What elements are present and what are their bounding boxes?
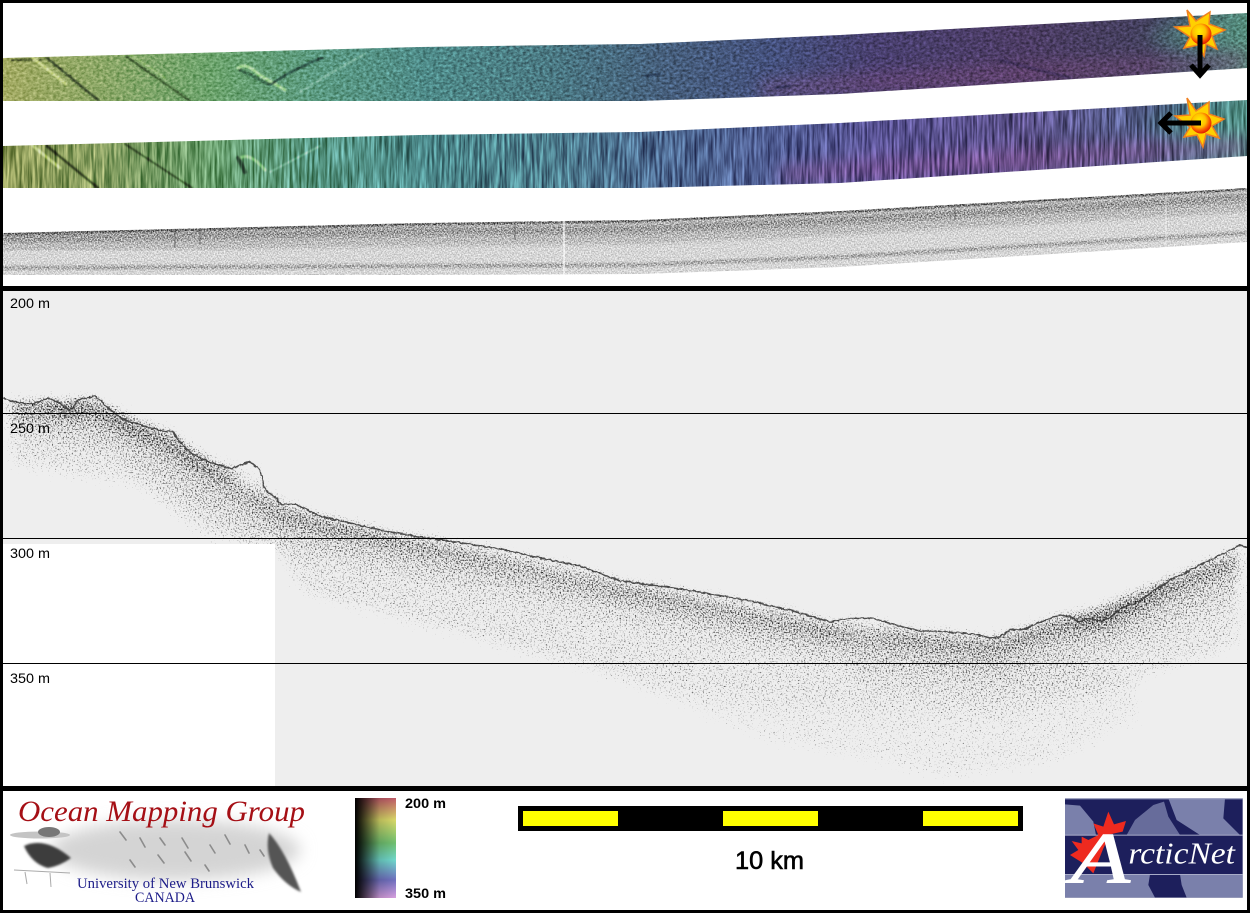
panel: sonar depth profile [3, 291, 1247, 786]
icon: sun lighting from north with arrow [1175, 10, 1225, 75]
depth label 350 m: 350 m [10, 670, 50, 686]
logo title: Ocean Mapping Group [18, 795, 305, 828]
strip: bathymetry lit from east [3, 98, 1247, 193]
depth label 300 m: 300 m [10, 545, 50, 561]
logo: Ocean Mapping Group [10, 795, 305, 906]
legend label bottom: 350 m [405, 885, 446, 901]
chart: sub-bottom speckle returns [3, 396, 1247, 785]
depth label 250 m: 250 m [10, 420, 50, 436]
logo initial: A [1065, 818, 1132, 898]
legend: depth colour bar [355, 795, 446, 901]
icon: sun lighting from east with arrow [1161, 98, 1224, 147]
panel: sun-illuminated bathymetry strips and backscatter [3, 10, 1247, 280]
depth label 200 m: 200 m [10, 295, 50, 311]
icon: maple leaf [1093, 812, 1126, 835]
icon: fish [268, 833, 301, 892]
blank data area [3, 544, 275, 786]
legend label top: 200 m [405, 795, 446, 811]
scale label: 10 km [735, 847, 804, 875]
strip: bathymetry lit from north [3, 10, 1247, 105]
logo subtitle: University of New Brunswick [77, 876, 255, 892]
logo: ArcticNet [1065, 798, 1243, 898]
logo wordmark: rcticNet [1128, 836, 1237, 870]
line: seabed profile [3, 396, 1247, 638]
icon: scallop [10, 827, 71, 868]
scale bar [518, 806, 1023, 875]
strip: grey backscatter mosaic [3, 185, 1247, 280]
logo country: CANADA [135, 890, 196, 906]
arrow: west [1161, 113, 1201, 133]
arrow: south [1191, 35, 1209, 75]
